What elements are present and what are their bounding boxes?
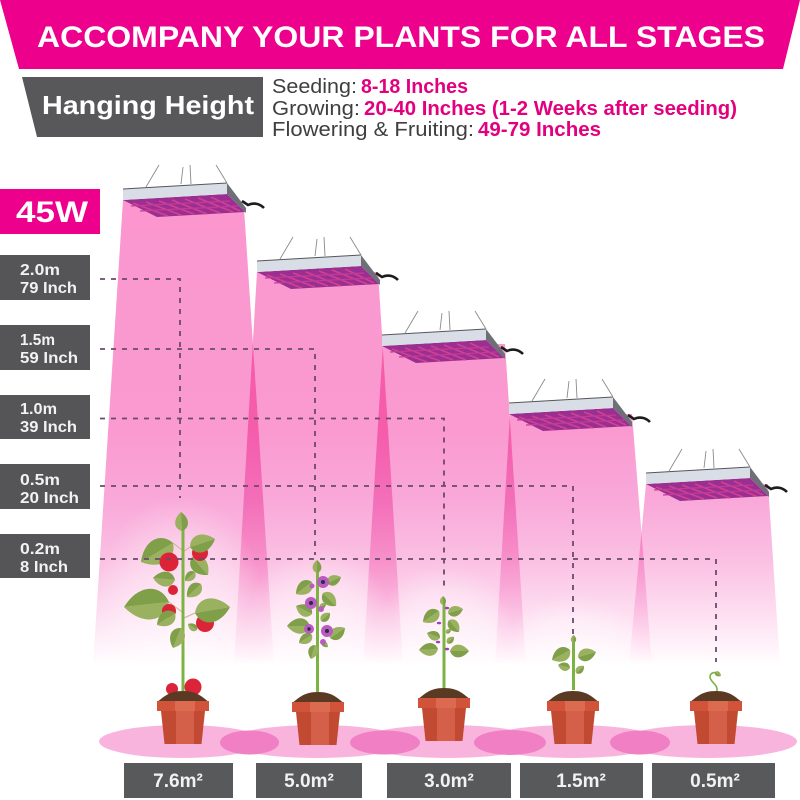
height label 0.2m: [0, 534, 90, 578]
coverage 5.0m²: 5.0m²: [284, 771, 334, 792]
lamp 1: [123, 165, 264, 217]
plant 2: flowering: [287, 560, 348, 692]
coverage 5.0m²: [256, 763, 362, 798]
pot 3: [418, 688, 470, 741]
hanging height list: Flowering & Fruiting:: [272, 119, 474, 141]
coverage 0.5m²: [652, 763, 775, 798]
plant 3: growing: [419, 596, 469, 690]
light beams: [93, 200, 780, 665]
pot 4: [547, 691, 599, 744]
height label 0.5m: 20 Inch: [20, 490, 79, 507]
hanging height list: Seeding:: [272, 76, 357, 98]
coverage 3.0m²: [387, 763, 511, 798]
hanging height badge: [22, 77, 263, 137]
height label 0.2m: 0.2m: [20, 541, 60, 558]
height label 1.0m: [0, 395, 90, 439]
coverage 7.6m²: [124, 763, 233, 798]
plant 4: young seedling: [549, 635, 598, 690]
coverage 3.0m²: 3.0m²: [424, 771, 474, 792]
wattage badge: 45W: [16, 196, 89, 229]
lamp 4: [509, 379, 650, 431]
coverage 1.5m²: [520, 763, 643, 798]
lamp 3: [382, 311, 523, 363]
hanging height list: 20-40 Inches (1-2 Weeks after seeding): [364, 98, 737, 120]
title: ACCOMPANY YOUR PLANTS FOR ALL STAGES: [37, 21, 765, 54]
pot 1: [157, 691, 209, 744]
ground light pools: [99, 725, 797, 758]
height label 0.5m: [0, 464, 90, 509]
coverage 1.5m²: 1.5m²: [556, 771, 606, 792]
hanging height list: 8-18 Inches: [361, 76, 468, 98]
wattage badge: [0, 189, 100, 234]
dashed height guides: [100, 279, 716, 662]
hanging height list: [272, 76, 737, 141]
hanging height list: Growing:: [272, 98, 360, 120]
badge label: Hanging Height: [42, 90, 254, 120]
height label 1.5m: [0, 325, 90, 370]
lamp 2: [257, 237, 398, 289]
lamp 5: [646, 449, 787, 501]
coverage 0.5m²: 0.5m²: [690, 771, 740, 792]
height label 1.5m: 1.5m: [20, 332, 55, 349]
pot 2: [292, 692, 344, 745]
header banner: [0, 0, 800, 69]
pot 5: [690, 691, 742, 744]
coverage 7.6m²: 7.6m²: [153, 771, 203, 792]
height label 2.0m: 79 Inch: [20, 280, 77, 297]
hanging height list: 49-79 Inches: [478, 119, 601, 141]
height label 2.0m: 2.0m: [20, 262, 60, 279]
height label 0.5m: 0.5m: [20, 472, 60, 489]
height label 1.0m: 39 Inch: [20, 419, 77, 436]
plant 1: fruiting: [122, 512, 232, 696]
height label 1.0m: 1.0m: [20, 401, 57, 418]
height label 1.5m: 59 Inch: [20, 350, 78, 367]
plant halos: [95, 495, 643, 725]
height label 2.0m: [0, 255, 90, 300]
plant 5: sprout: [710, 670, 722, 691]
height label 0.2m: 8 Inch: [20, 559, 68, 576]
